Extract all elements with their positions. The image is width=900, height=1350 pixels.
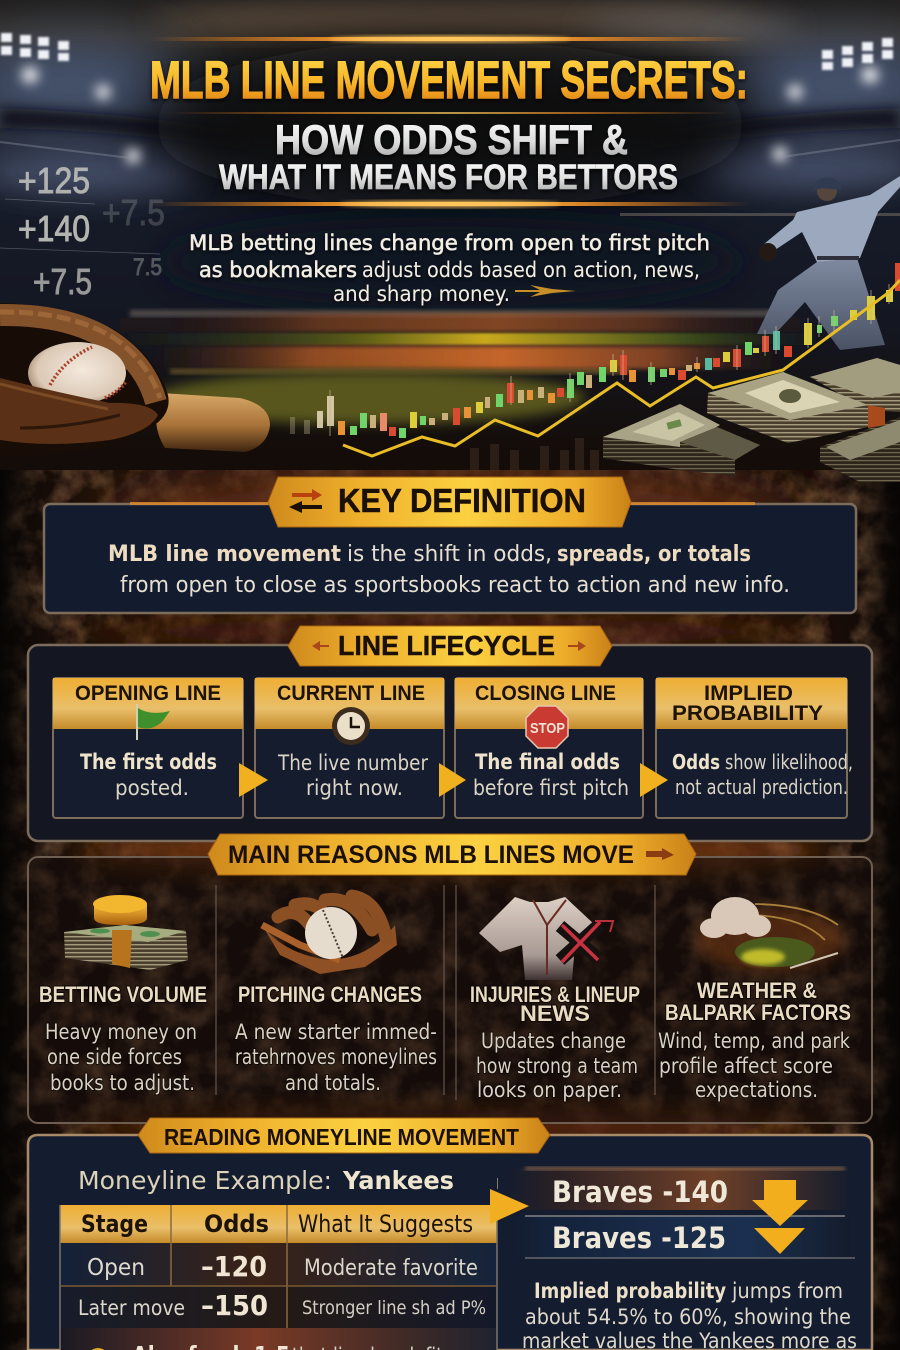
card: closing line [455, 678, 643, 818]
implied probability text: Implied probability [534, 1279, 726, 1303]
moneyline example heading: Yankees [342, 1166, 454, 1195]
pitcher figure [757, 176, 900, 350]
icon: green flag [136, 704, 170, 740]
card: implied probability: IMPLIED [704, 682, 793, 705]
yellow trend line [343, 280, 900, 456]
key definition text: MLB line movement [108, 542, 341, 567]
moneyline example heading [78, 1166, 454, 1195]
moneyline table: Stronger line sh ad P% [302, 1297, 486, 1319]
moneyline table: Open [87, 1255, 145, 1281]
line lifecycle banner: LINE LIFECYCLE [338, 630, 555, 661]
card: opening line [53, 678, 243, 818]
main reasons banner: MAIN REASONS MLB LINES MOVE [228, 841, 634, 869]
moneyline example heading: Moneyline Example: [78, 1166, 332, 1195]
reason: injuries and lineup news: looks on paper. [477, 1078, 622, 1102]
reason: weather and balpark factors [658, 897, 851, 1102]
braves odds comparison [505, 1167, 855, 1259]
main reasons panel [28, 857, 872, 1123]
subtitle: WHAT IT MEANS FOR BETTORS [219, 158, 678, 197]
icon: coin and cash [64, 895, 188, 970]
key definition text: spreads, or totals [557, 542, 751, 567]
reason: weather and balpark factors: Wind, temp, and park [658, 1029, 851, 1053]
arrow to right column [490, 1178, 529, 1224]
reason: injuries and lineup news: how strong a team [476, 1054, 638, 1078]
reason: pitching changes: A new starter immed- [235, 1020, 437, 1044]
reason: pitching changes [235, 896, 437, 1095]
reason: injuries and lineup news [470, 897, 640, 1102]
key definition text: is the shift in odds, [347, 542, 552, 567]
reason: weather and balpark factors: profile affect score [659, 1054, 833, 1078]
intro text: and sharp money. [333, 282, 510, 306]
cash stacks [603, 358, 900, 482]
moneyline table: Odds [204, 1210, 269, 1238]
faded odds numbers: +7.5 [33, 261, 92, 302]
main reasons banner [208, 834, 696, 875]
card: current line: right now. [306, 776, 403, 800]
key definition panel [44, 502, 856, 613]
implied probability text [522, 1279, 857, 1350]
braves odds comparison: Braves -125 [552, 1221, 726, 1255]
icon: stop sign [526, 706, 568, 748]
faded odds numbers: 7.5 [133, 254, 162, 281]
icon: clock [332, 707, 370, 745]
icon: cloud over stadium [696, 897, 844, 972]
moneyline table: –150 [201, 1289, 268, 1322]
card: implied probability: not actual prediction. [675, 775, 848, 799]
card: opening line: OPENING LINE [75, 682, 221, 705]
moneyline table: Later move [78, 1296, 185, 1320]
subtitle: HOW ODDS SHIFT & [275, 116, 628, 163]
reading moneyline banner [138, 1118, 550, 1153]
reason: weather and balpark factors: WEATHER & [697, 978, 817, 1003]
reason: betting volume: books to adjust. [50, 1071, 195, 1095]
icon: right arrow [568, 641, 586, 651]
card: implied probability: Odds [672, 750, 720, 774]
moneyline table: What It Suggests [298, 1210, 473, 1238]
key definition text: from open to close as sportsbooks react to action and new info. [120, 573, 790, 598]
implied probability text: jumps from [731, 1279, 843, 1303]
card: opening line: The first odds [80, 750, 217, 774]
faded odds numbers: +140 [18, 208, 90, 249]
card: current line: The live number [277, 751, 428, 775]
reason: pitching changes: PITCHING CHANGES [238, 982, 422, 1007]
key definition banner [268, 477, 631, 527]
faded odds numbers [0, 160, 165, 302]
icon: down arrows [752, 1180, 808, 1254]
card: current line: CURRENT LINE [277, 682, 425, 705]
reason: betting volume [39, 895, 207, 1095]
moneyline table: Moderate favorite [304, 1256, 478, 1281]
card: current line [255, 678, 444, 818]
reading moneyline banner: READING MONEYLINE MOVEMENT [164, 1124, 519, 1150]
hero illustration: outfield and infield bands [0, 310, 900, 470]
card: closing line: CLOSING LINE [475, 682, 616, 705]
card: implied probability: show likelihood, [725, 750, 853, 774]
reason: injuries and lineup news: INJURIES & LINEUP [470, 982, 640, 1007]
faded odds numbers: +7.5 [102, 192, 165, 233]
icon: arrow [646, 848, 674, 860]
card: implied probability: PROBABILITY [672, 702, 823, 725]
intro text: MLB betting lines change from open to first pitch [189, 231, 710, 255]
key definition banner: KEY DEFINITION [338, 482, 586, 519]
reason: weather and balpark factors: expectations. [695, 1078, 818, 1102]
faded odds numbers: +125 [18, 160, 90, 201]
icon: glove with ball [262, 896, 397, 974]
intro text: adjust odds based on action, news, [362, 258, 700, 282]
line lifecycle banner [288, 626, 612, 666]
moneyline table: –120 [201, 1250, 267, 1283]
icon: small gold arrow [515, 285, 576, 297]
icon: swap arrows [289, 489, 322, 513]
reason: betting volume: BETTING VOLUME [39, 982, 207, 1007]
card: closing line: The final odds [475, 750, 620, 774]
braves odds comparison: Braves -140 [552, 1175, 728, 1209]
key definition text [108, 542, 790, 598]
baseball bat [156, 393, 270, 452]
cut-off table note [92, 1341, 443, 1350]
moneyline table: Stage [81, 1210, 148, 1238]
reading moneyline panel [28, 1135, 872, 1350]
subtitle [219, 116, 678, 197]
reason: injuries and lineup news: NEWS [520, 1001, 590, 1026]
reason: betting volume: Heavy money on [45, 1020, 197, 1044]
candlestick chart [290, 263, 900, 438]
intro text: as bookmakers [199, 258, 357, 282]
implied probability text: about 54.5% to 60%, showing the [525, 1305, 851, 1329]
icon: left arrow [312, 641, 329, 651]
reason: weather and balpark factors: BALPARK FACTORS [665, 1000, 851, 1025]
line lifecycle panel [28, 645, 872, 841]
hero decorative glow lines [150, 36, 900, 216]
reason: pitching changes: and totals. [285, 1071, 381, 1095]
lifecycle arrows [239, 763, 668, 797]
card: opening line: posted. [115, 776, 189, 800]
card: closing line: before first pitch [473, 776, 629, 800]
icon: jersey with red x [479, 897, 613, 980]
reason: betting volume: one side forces [47, 1045, 182, 1069]
intro text [189, 231, 710, 306]
reason: pitching changes: ratehrnoves moneylines [235, 1045, 437, 1069]
card: implied probability [656, 678, 853, 818]
hero illustration: stadium background [0, 0, 900, 470]
icon: stop sign: STOP [530, 720, 565, 737]
glove and baseball [0, 303, 169, 456]
moneyline table [60, 1205, 497, 1350]
reason: injuries and lineup news: Updates change [481, 1029, 626, 1053]
